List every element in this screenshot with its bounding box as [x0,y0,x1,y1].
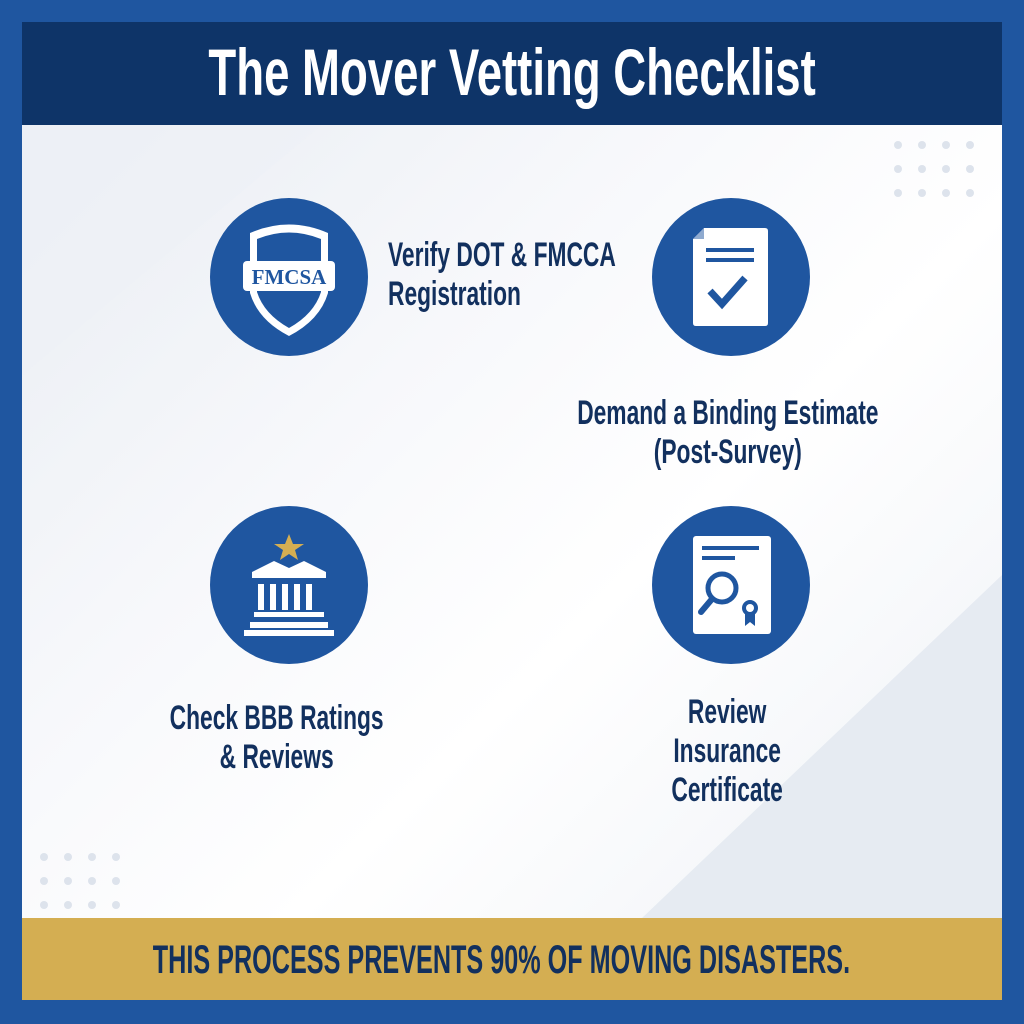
label: binding estimate: (Post-Survey) [654,433,802,471]
body panel [22,125,1002,918]
label: insurance: Insurance [673,732,781,770]
label: insurance [671,693,783,809]
label: BBB: & Reviews [220,738,334,776]
footer text: THIS PROCESS PREVENTS 90% OF MOVING DISASTERS. [152,938,850,982]
label: verify: Registration [388,275,521,313]
icon: FMCSA shield [210,198,368,356]
icon: insurance certificate [652,506,810,664]
label: binding estimate [577,394,879,471]
label: verify: Verify DOT & FMCCA [388,236,616,274]
label: BBB: Check BBB Ratings [170,699,384,737]
label: BBB [170,699,384,776]
label: insurance: Review [688,693,766,731]
title: The Mover Vetting Checklist [208,35,816,109]
icon: BBB building [210,506,368,664]
label: verify [388,236,616,313]
label: binding estimate: Demand a Binding Estimate [577,394,879,432]
icon: document check [652,198,810,356]
icon: FMCSA shield: FMCSA [252,265,327,289]
label: insurance: Certificate [671,771,783,809]
header [22,22,1002,125]
footer banner [22,918,1002,1000]
